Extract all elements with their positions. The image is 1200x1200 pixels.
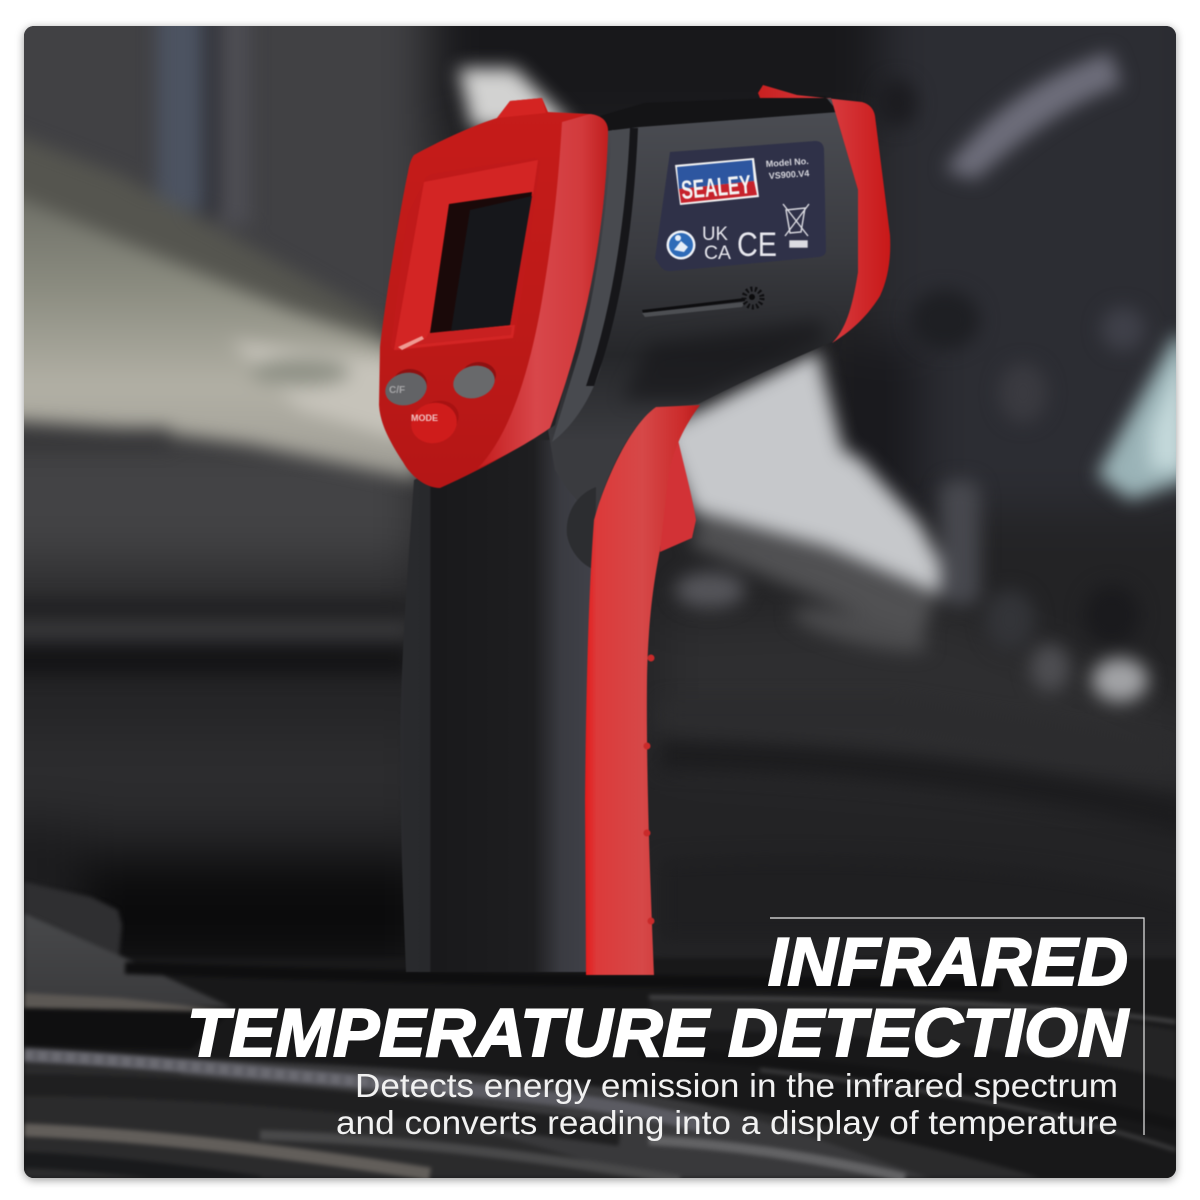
- top tab: [497, 98, 546, 118]
- specification label: [655, 141, 826, 271]
- head side panel: [552, 197, 624, 441]
- body text: Detects energy emission in the infrared spectrum: [355, 1067, 1118, 1104]
- bonnet edge: [24, 136, 382, 343]
- headline: Infrared Temperature Detection: TEMPERATURE DETECTION: [187, 995, 1130, 1071]
- bonnet: [0, 185, 420, 480]
- display bezel: [391, 158, 540, 351]
- icon: read manual: [666, 230, 696, 260]
- Sealey logo: [675, 158, 759, 205]
- CE mark: CE: [737, 226, 777, 264]
- infrared thermometer: [379, 85, 890, 975]
- light patch under head: [660, 350, 947, 595]
- UKCA mark: [702, 224, 731, 264]
- spot highlights: [1092, 658, 1148, 702]
- button: down arrow: [452, 362, 496, 399]
- headline: Infrared Temperature Detection: [187, 924, 1130, 1071]
- wall pillar strips: [157, 0, 204, 210]
- horizontal dark bands: [136, 418, 175, 444]
- UKCA mark: UK: [702, 224, 728, 245]
- body text: and converts reading into a display of temperature: [336, 1104, 1118, 1141]
- red front shield: [379, 98, 608, 488]
- button: C/F: C/F: [389, 385, 405, 396]
- foreground engine bay with cables: [0, 882, 1200, 1188]
- red rear cap: [758, 85, 890, 343]
- button: MODE: [410, 401, 458, 444]
- wide grey band: [24, 1062, 1032, 1178]
- lower head shading: [622, 320, 825, 400]
- display screen: [451, 196, 532, 331]
- button: C/F: [384, 368, 428, 406]
- trigger: [660, 440, 696, 552]
- lower bright strip: [690, 520, 935, 640]
- button: MODE: MODE: [411, 413, 438, 423]
- trigger recess: [567, 487, 596, 570]
- model number: Model No.: [765, 156, 809, 169]
- grip body: [400, 440, 604, 972]
- white patch behind head: [458, 68, 575, 128]
- right pillars: [940, 480, 980, 605]
- headline frame lines: [770, 918, 1144, 1135]
- specification label: VS900.V4: [768, 168, 810, 181]
- cone shape: [24, 913, 231, 1007]
- dark cap: [24, 882, 122, 955]
- front shield side band: [478, 114, 608, 468]
- headline: Infrared Temperature Detection: INFRARED: [768, 924, 1128, 1000]
- top silver band: [24, 993, 240, 1012]
- laser aperture slot: [642, 289, 762, 317]
- Sealey logo: SEALEY: [680, 169, 752, 205]
- body text: [336, 1067, 1118, 1141]
- lower right bands: [660, 700, 1176, 775]
- blurred garage background: shaped highlights: [24, 26, 1176, 817]
- red handle strip: [585, 405, 700, 975]
- head body: [548, 98, 858, 520]
- icon: WEEE bin: [783, 204, 809, 247]
- display screen recess: [430, 192, 532, 333]
- ribbed cable strips: [24, 1055, 700, 1125]
- handle bumps: [644, 654, 654, 924]
- UKCA mark: CA: [704, 243, 731, 264]
- cable band right: [650, 995, 1176, 1080]
- head top ridge: [600, 96, 838, 131]
